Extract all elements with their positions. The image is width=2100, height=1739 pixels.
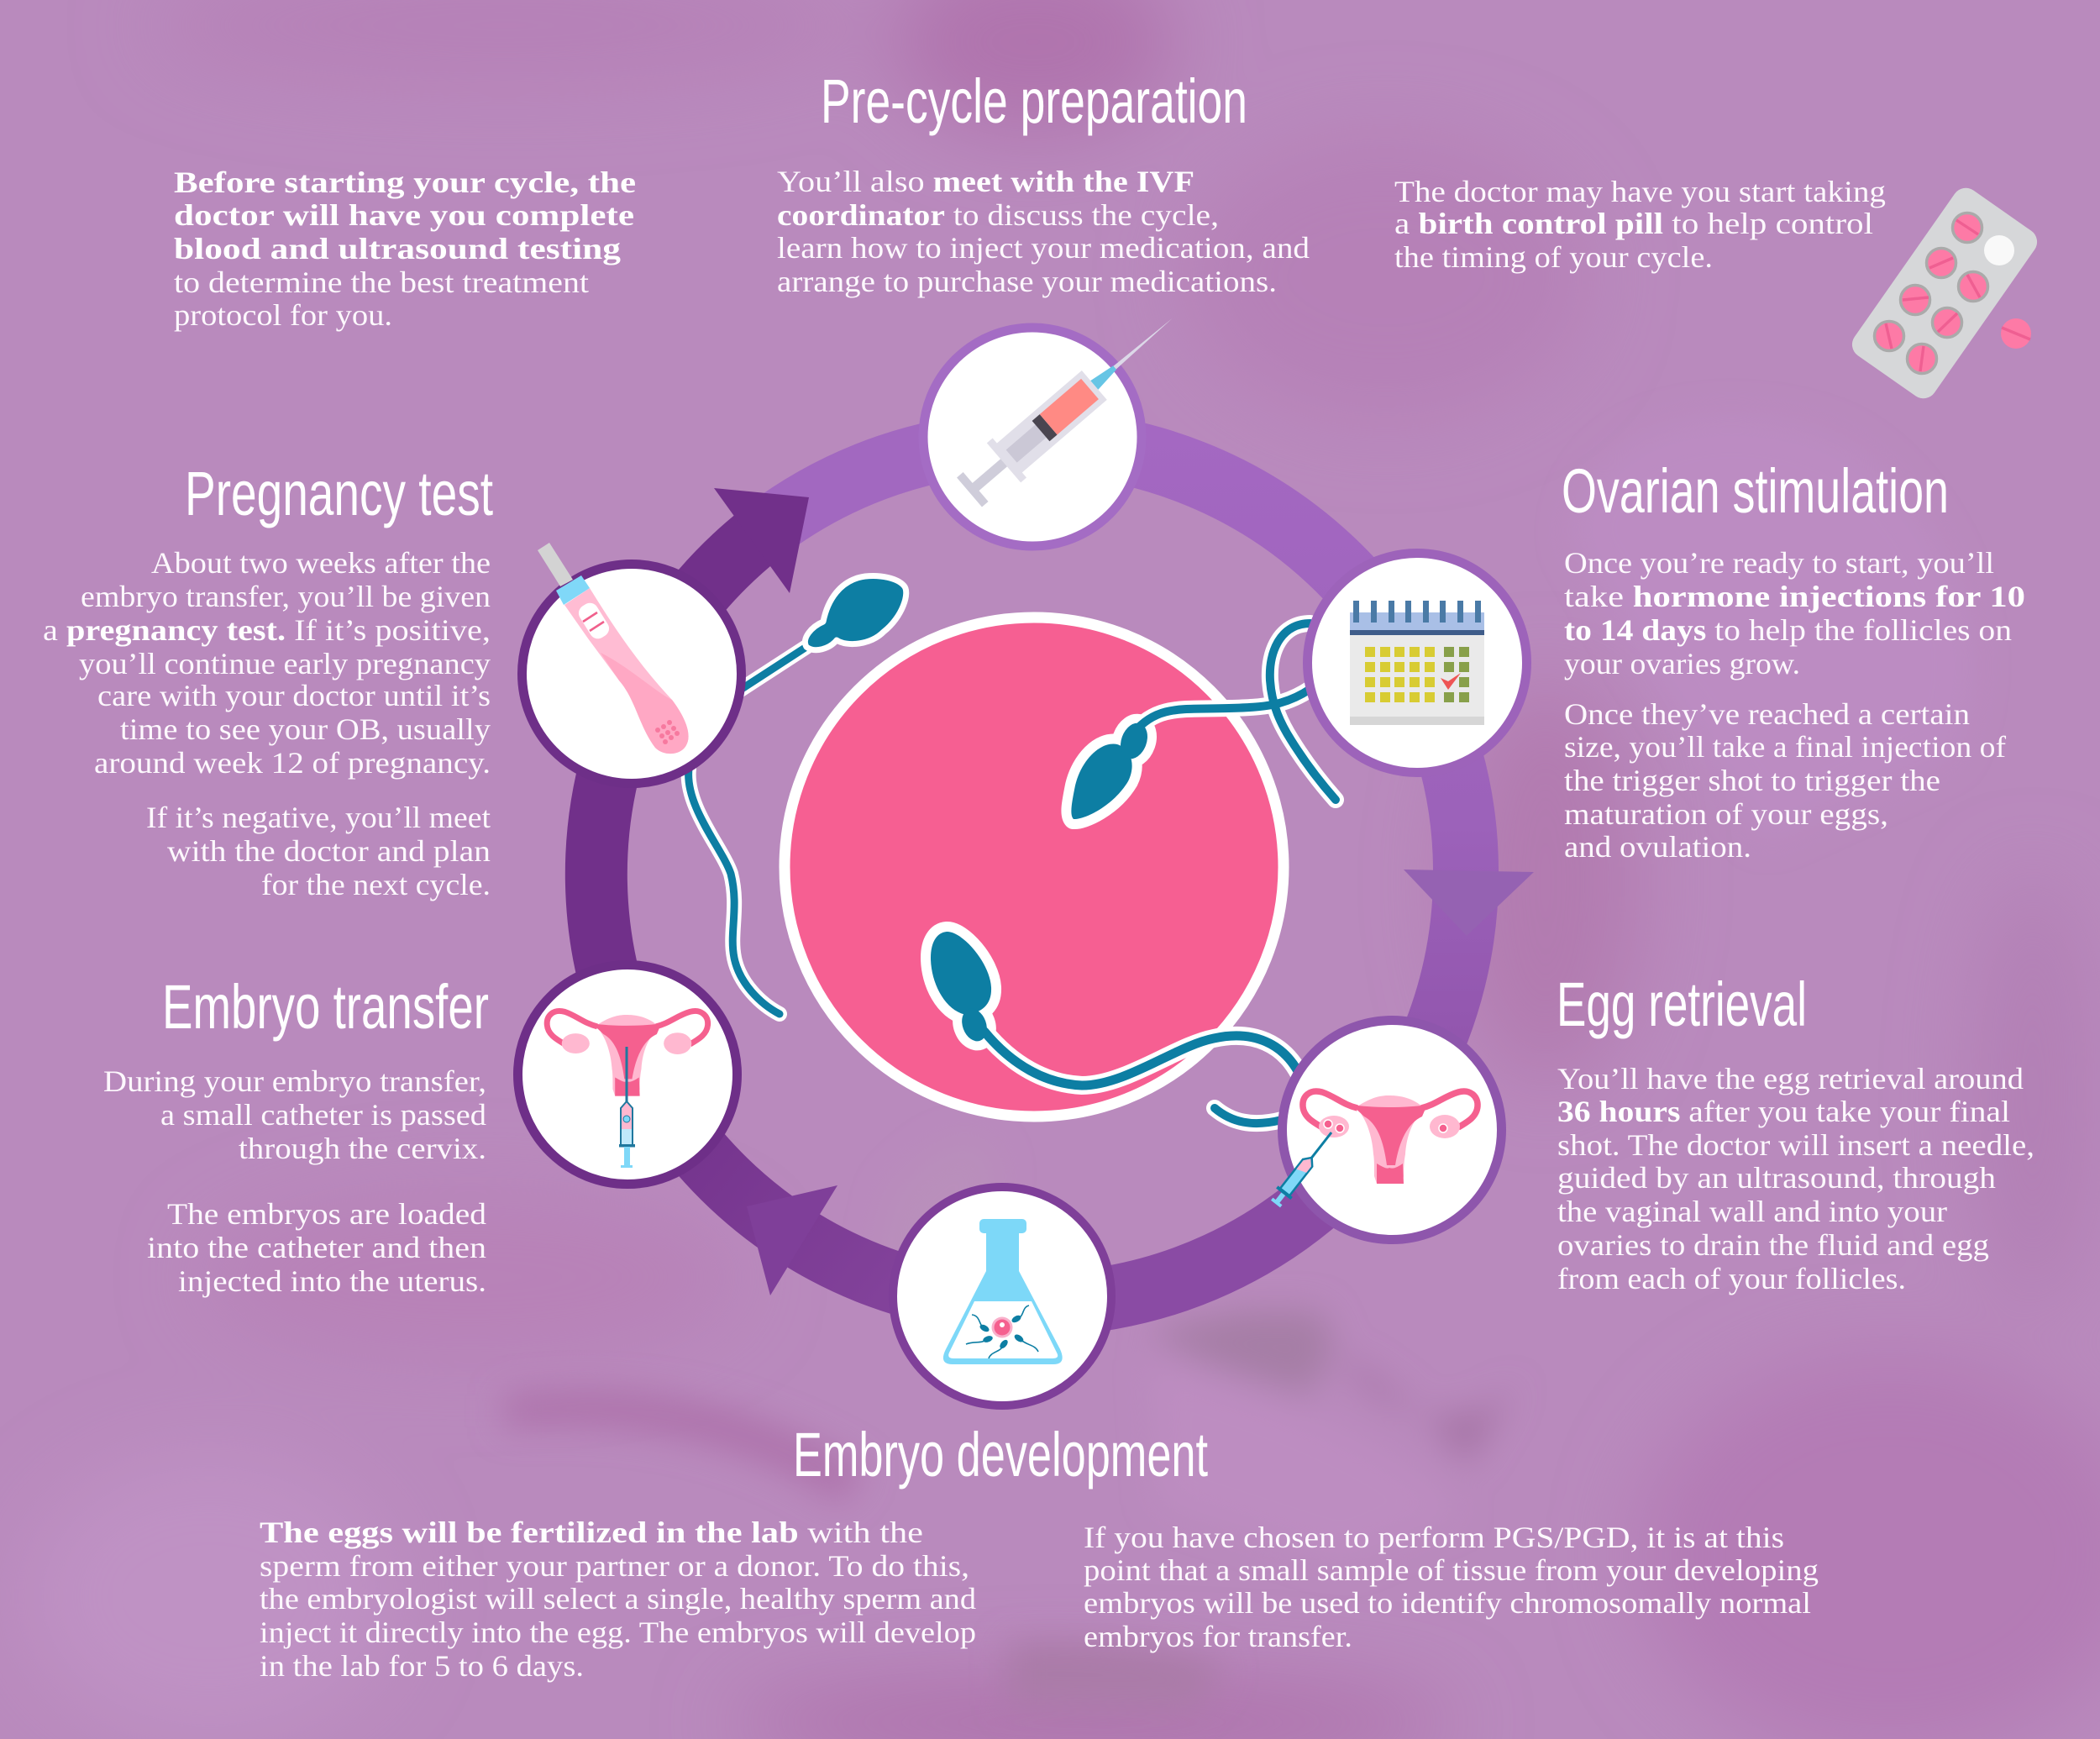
text: blood and ultrasound testing: doctor will have you complete [174,198,634,232]
step circle: embryo transfer [517,964,738,1185]
heading: pre-cycle preparation: Pre-cycle preparation [821,66,1247,136]
text: ovarian stimulation details: the trigger shot to trigger the [1564,764,1940,797]
step circle: egg retrieval [1268,1020,1502,1240]
step circle: pregnancy test [522,543,741,783]
heading: pregnancy test: Pregnancy test [185,459,493,528]
text: PGS/PGD sampling [1084,1521,1819,1653]
heading: embryo transfer: Embryo transfer [162,972,489,1042]
text: meet with IVF coordinator: arrange to purchase your medications. [777,265,1277,298]
step circle: ovarian stimulation calendar [1307,553,1527,773]
icon: uterus with egg retrieval needle [1268,1091,1478,1210]
text: egg retrieval details: from each of your follicles. [1557,1262,1906,1295]
arrow: right downward arrowhead [1404,870,1534,936]
text: ovarian stimulation details: your ovaries grow. [1564,647,1800,680]
text: blood and ultrasound testing [174,165,636,332]
text: embryo transfer details: During your embryo transfer, [103,1064,486,1098]
heading: embryo development: Embryo development [793,1420,1208,1489]
text: pregnancy test details: for the next cycle. [261,868,491,901]
text: embryo transfer details: The embryos are loaded [167,1197,486,1231]
text: egg retrieval details: ovaries to drain the fluid and egg [1557,1228,1989,1262]
text: embryo transfer details: injected into the uterus. [178,1264,486,1298]
sperm 2: bottom tail to egg retrieval [931,932,1302,1123]
text: fertilization in the lab [260,1516,976,1683]
text: meet with IVF coordinator: You’ll also meet with the IVF [777,165,1194,198]
text: ovarian stimulation details: size, you’ll take a final injection of [1564,730,2006,764]
text: embryo transfer details: a small catheter is passed [160,1098,486,1132]
text: birth control pill [1394,175,1886,274]
text: blood and ultrasound testing: blood and ultrasound testing [174,232,621,265]
text: egg retrieval details: shot. The doctor will insert a needle, [1557,1128,2034,1162]
text: PGS/PGD sampling: If you have chosen to perform PGS/PGD, it is at this [1084,1521,1784,1554]
text: pregnancy test details: About two weeks after the [151,546,491,580]
text: embryo transfer details: through the cervix. [239,1132,486,1165]
text: blood and ultrasound testing: to determine the best treatment [174,265,589,299]
text: PGS/PGD sampling: embryos will be used to identify chromosomally normal [1084,1586,1811,1620]
icon: uterus with catheter [547,1011,708,1168]
cycle ring [596,442,1466,1304]
text: pregnancy test details: you’ll continue early pregnancy [79,647,491,680]
icon: pregnancy test stick [538,543,689,754]
heading: egg retrieval: Egg retrieval [1557,969,1807,1039]
text: pregnancy test details: care with your doctor until it’s [97,679,491,712]
text: ovarian stimulation details: and ovulation. [1564,830,1751,864]
text: birth control pill: a birth control pill to help control [1394,207,1873,240]
text: birth control pill: the timing of your cycle. [1394,240,1713,274]
central egg [785,617,1310,1151]
text: ovarian stimulation details: Once you’re ready to start, you’ll [1564,546,1994,580]
arrow: bottom-left arrowhead [747,1185,837,1295]
text: egg retrieval details [1557,1062,2034,1295]
text: egg retrieval details: 36 hours after you take your final [1557,1095,2010,1128]
icon: flask with sperm and egg [943,1219,1063,1364]
text: ovarian stimulation details: take hormone injections for 10 [1564,580,2025,613]
text: meet with IVF coordinator [777,165,1310,298]
text: meet with IVF coordinator: coordinator to discuss the cycle, [777,198,1219,232]
text: fertilization in the lab: the embryologist will select a single, healthy sperm and [260,1582,976,1616]
text: PGS/PGD sampling: embryos for transfer. [1084,1620,1352,1653]
text: egg retrieval details: the vaginal wall and into your [1557,1195,1947,1228]
text: embryo transfer details [103,1064,486,1298]
text: fertilization in the lab: inject it directly into the egg. The embryos will develop [260,1616,976,1649]
step circle: pre-cycle syringe [923,299,1189,546]
text: blood and ultrasound testing: Before starting your cycle, the [174,165,636,199]
text: egg retrieval details: You’ll have the egg retrieval around [1557,1062,2024,1095]
text: egg retrieval details: guided by an ultrasound, through [1557,1161,1996,1195]
text: ovarian stimulation details: to 14 days to help the follicles on [1564,613,2012,647]
text: ovarian stimulation details: maturation of your eggs, [1564,797,1888,831]
text: pregnancy test details: with the doctor and plan [167,834,491,868]
text: pregnancy test details: a pregnancy test. If it’s positive, [43,613,491,647]
text: blood and ultrasound testing: protocol for you. [174,298,392,332]
step circle: embryo development flask [893,1187,1111,1405]
text: pregnancy test details [43,546,491,901]
text: pregnancy test details: around week 12 of pregnancy. [94,746,491,780]
text: PGS/PGD sampling: point that a small sample of tissue from your developing [1084,1553,1819,1587]
text: fertilization in the lab: The eggs will be fertilized in the lab with the [260,1516,923,1549]
text: embryo transfer details: into the catheter and then [147,1231,486,1264]
text: pregnancy test details: time to see your OB, usually [120,712,491,746]
text: ovarian stimulation details [1564,546,2025,864]
icon: blister pack of pills [1847,182,2042,404]
sperm 3: left swimmer [689,575,906,1014]
text: birth control pill: The doctor may have you start taking [1394,175,1886,208]
icon: calendar [1350,601,1484,725]
arrow: top-left direction arrowhead [714,488,809,593]
sperm 1: looping around calendar [1071,623,1336,819]
text: pregnancy test details: If it’s negative, you’ll meet [146,801,491,834]
text: pregnancy test details: embryo transfer, you’ll be given [81,580,491,613]
text: meet with IVF coordinator: learn how to inject your medication, and [777,231,1310,265]
text: fertilization in the lab: sperm from either your partner or a donor. To do this, [260,1549,969,1583]
icon: syringe [953,299,1189,512]
text: ovarian stimulation details: Once they’ve reached a certain [1564,697,1970,731]
text: fertilization in the lab: in the lab for 5 to 6 days. [260,1649,584,1683]
heading: ovarian stimulation: Ovarian stimulation [1562,456,1949,526]
